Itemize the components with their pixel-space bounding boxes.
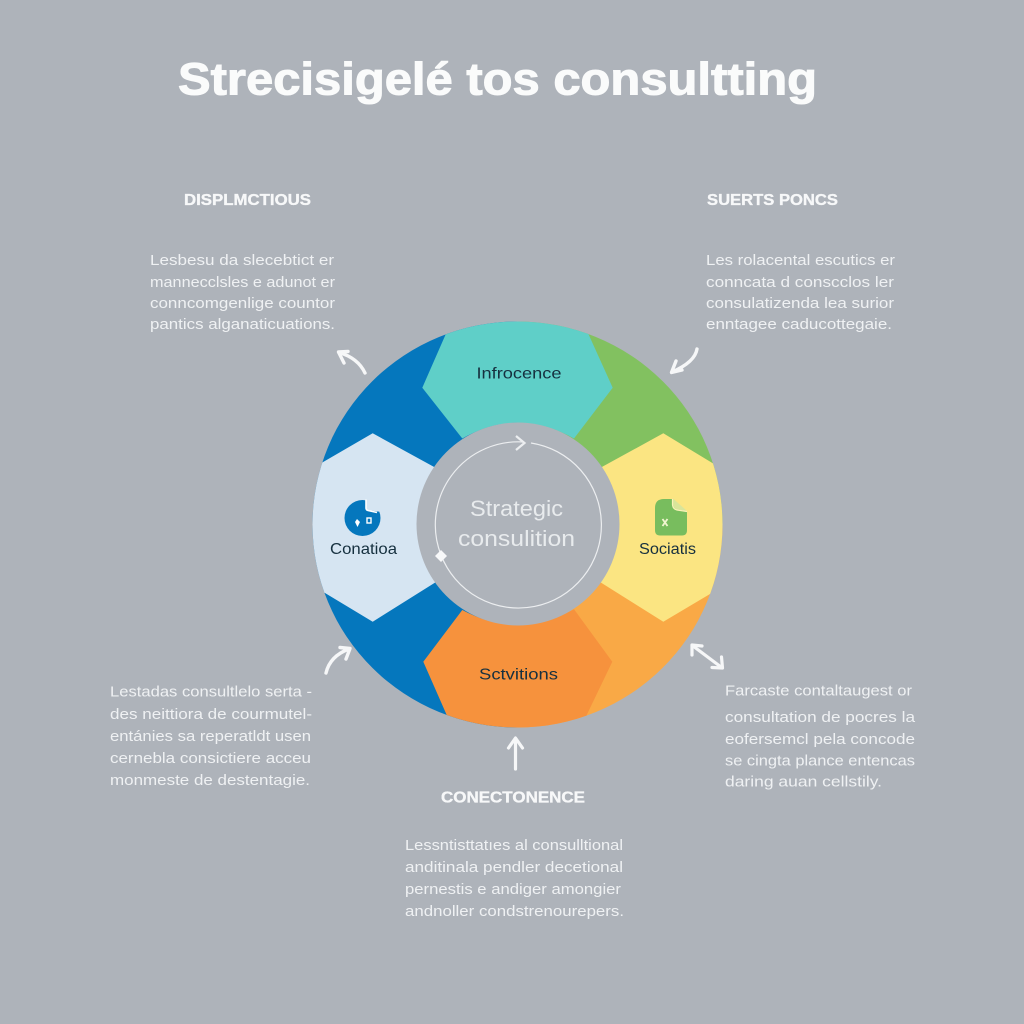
body: top-left: conncomgenlige countor [150, 295, 335, 312]
heading: top-right: SUERTS PONCS [707, 192, 838, 209]
label: Conatioa: Conatioa [330, 541, 397, 558]
circular diagram [312, 322, 722, 728]
arrow: top-right [672, 349, 697, 372]
icon: green document [655, 498, 687, 536]
panel: lower-left text block: monmeste de destentagie. [110, 772, 310, 789]
segment: pale blue Conatioa [312, 433, 435, 622]
segment: teal Infrocence [422, 322, 613, 438]
segment: green background [520, 322, 722, 522]
panel: bottom text block [405, 790, 624, 920]
label: Sctvitions: Sctvitions [479, 666, 558, 684]
body: top-left: Lesbesu da slecebtict er [150, 252, 334, 269]
body: top-left [150, 252, 335, 333]
label: Infrocence: Infrocence [476, 366, 562, 382]
panel: lower-left text block: entánies sa reperatldt usen [110, 728, 311, 745]
arrow: top-left [338, 352, 365, 373]
segment: yellow Sociatis [601, 433, 722, 622]
body: bottom [405, 837, 624, 920]
body: bottom: Lessntisttatıes al consulltional [405, 837, 623, 854]
segment: light orange background [519, 526, 722, 728]
icon: blue document circle [344, 498, 382, 536]
body: top-right: enntagee caducottegaie. [706, 316, 892, 333]
body: top-left: pantics alganaticuations. [150, 316, 335, 333]
arrow: lower-left [326, 648, 350, 673]
body: top-right: consulatizenda lea surior [706, 295, 894, 312]
centre label: Strategic [470, 496, 563, 521]
centre circle [416, 422, 620, 626]
arrow: bottom up [508, 738, 522, 769]
heading: top-left: DISPLMCTIOUS [184, 192, 311, 209]
panel: top-right text block [706, 192, 895, 333]
panel: lower-right text block: daring auan cellstily. [725, 774, 882, 790]
body: bottom: pernestis e andiger amongier [405, 881, 621, 898]
panel: lower-right text block: se cingta plance entencas [725, 752, 915, 770]
panel: lower-right text block [725, 682, 916, 790]
body: top-left: mannecclsles e adunot er [150, 274, 335, 291]
heading: bottom: CONECTONENCE [441, 790, 585, 806]
label: Sociatis: Sociatis [639, 541, 696, 558]
panel: lower-left text block: Lestadas consultlelo serta - [110, 684, 312, 700]
panel: lower-left text block [110, 684, 312, 789]
panel: lower-right text block: consultation de pocres la [725, 709, 916, 726]
ring segments clipped to disc [312, 322, 722, 728]
circular diagram: consulition [458, 526, 575, 551]
body: top-right: Les rolacental escutics er [706, 252, 895, 269]
panel: lower-right text block: Farcaste contaltaugest or [725, 682, 912, 700]
panel: lower-left text block: cernebla consictiere acceu [110, 750, 311, 767]
circular arrow ring [435, 436, 601, 608]
panel: lower-right text block: eofersemcl pela concode [725, 731, 915, 748]
panel: lower-left text block: des neittiora de courmutel- [110, 706, 312, 723]
body: top-right: conncata d conscclos ler [706, 274, 894, 291]
segment: blue background [312, 322, 516, 728]
title: Strecisigelé tos consultting [178, 54, 817, 104]
body: bottom: andnoller condstrenourepers. [405, 903, 624, 920]
arrow: lower-right double [692, 645, 722, 668]
body: top-right [706, 252, 895, 333]
segment: orange Sctvitions [423, 610, 612, 728]
panel: top-left text block [150, 192, 335, 333]
body: bottom: anditinala pendler decetional [405, 859, 623, 876]
